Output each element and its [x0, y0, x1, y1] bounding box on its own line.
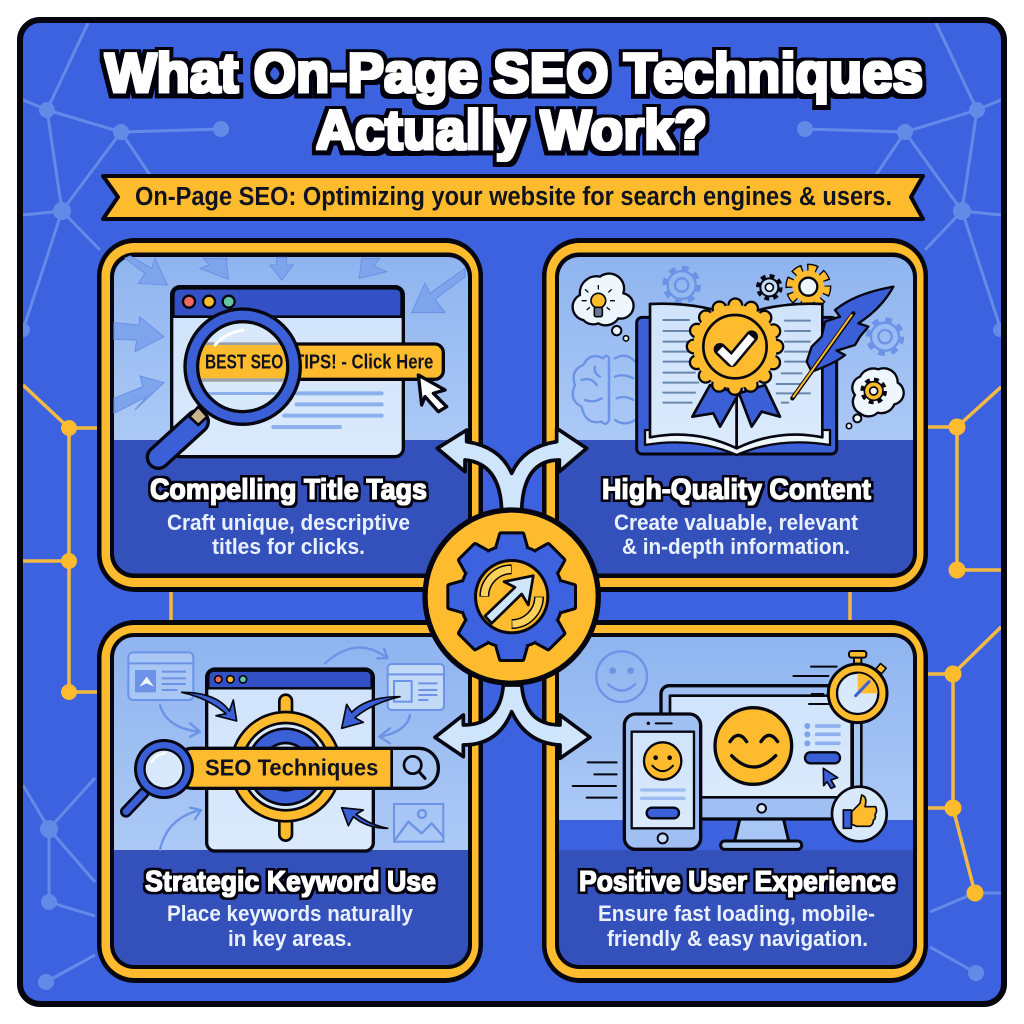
heading: Compelling Title Tags	[150, 474, 427, 506]
panel: positive user experience	[542, 620, 928, 983]
faded gears	[665, 268, 902, 353]
panel: high-quality content	[542, 238, 928, 592]
open book	[637, 304, 837, 455]
small gear	[758, 276, 780, 298]
cursor	[418, 375, 447, 412]
description	[167, 901, 414, 951]
hub circle	[422, 507, 601, 686]
refresh arcs	[484, 569, 539, 624]
panel frame	[97, 620, 483, 983]
arrow: top branching	[437, 428, 587, 510]
stopwatch	[828, 651, 887, 723]
browser window	[207, 669, 373, 851]
central hub with gear and arrows	[422, 428, 601, 758]
gear	[449, 534, 574, 659]
description: Place keywords naturally	[167, 901, 414, 926]
panel: compelling title tags	[97, 238, 483, 592]
panel frame	[542, 238, 928, 592]
magnifying glass: BEST SEO	[205, 351, 283, 373]
thought cloud: gear	[846, 368, 904, 429]
desktop monitor	[661, 686, 858, 849]
search bar	[173, 748, 438, 788]
magnifying glass	[126, 739, 194, 812]
description	[614, 510, 859, 559]
title: What On-Page SEO Techniques	[105, 41, 923, 104]
panel: strategic keyword use	[97, 620, 483, 983]
browser window	[172, 287, 403, 457]
smartphone	[624, 714, 701, 849]
illustration: devices and smiley	[573, 651, 887, 849]
title: Actually Work?	[316, 98, 707, 161]
screen content list and cursor	[804, 723, 840, 788]
heading: High-Quality Content	[602, 474, 871, 506]
faded page icons and arcs	[128, 648, 444, 850]
search bar: SEO Techniques	[205, 755, 378, 781]
quill feather	[792, 287, 893, 398]
title tag bar: TIPS! - Click Here	[294, 351, 433, 373]
illustration: book, badge and quill	[573, 268, 904, 455]
magnifying glass	[158, 307, 302, 457]
background arrows	[114, 256, 465, 413]
curved pointing arrows	[182, 692, 400, 828]
illustration: window with title tag and magnifier	[114, 256, 465, 457]
big smiley	[715, 708, 792, 784]
description	[167, 510, 410, 559]
speed lines	[573, 667, 837, 798]
subtitle banner	[103, 176, 923, 219]
description: Ensure fast loading, mobile-	[598, 901, 875, 926]
award badge with check mark	[693, 305, 777, 388]
target rings	[230, 701, 342, 834]
description: titles for clicks.	[212, 534, 365, 559]
description	[598, 901, 875, 951]
faded smiley	[596, 651, 647, 702]
growth arrow	[485, 576, 533, 623]
subtitle banner: On-Page SEO: Optimizing your website for search engines & users.	[135, 183, 892, 211]
heading: Positive User Experience	[579, 866, 896, 898]
description: friendly & easy navigation.	[607, 926, 868, 951]
yellow gear	[790, 268, 827, 305]
description: in key areas.	[228, 926, 352, 951]
connector	[853, 715, 861, 790]
award ribbon	[692, 385, 780, 427]
title	[105, 41, 923, 161]
heading: Strategic Keyword Use	[145, 866, 436, 898]
description: & in-depth information.	[622, 534, 850, 559]
illustration: target and search bar	[126, 648, 444, 851]
faded brain	[573, 356, 635, 424]
description: Craft unique, descriptive	[167, 510, 410, 535]
panel frame	[97, 238, 483, 592]
description: Create valuable, relevant	[614, 510, 859, 535]
background network: yellow circuit nodes	[23, 385, 1001, 902]
panel frame	[542, 620, 928, 983]
thought cloud: light bulb	[573, 274, 634, 341]
arrow: bottom branching	[435, 685, 590, 758]
thumbs up badge	[832, 787, 887, 841]
title tag bar	[277, 344, 443, 379]
